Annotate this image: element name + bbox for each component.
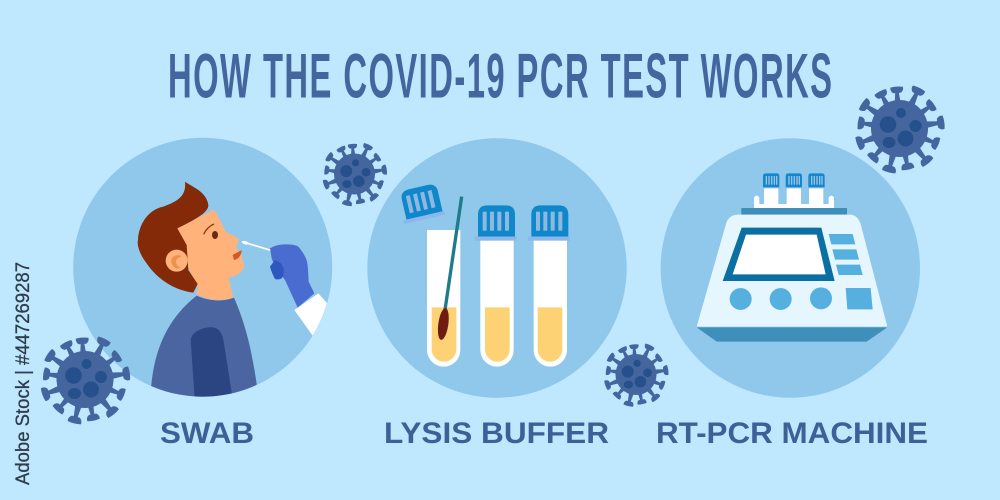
panel: rt-pcr machine [661, 138, 920, 398]
title: HOW THE COVID-19 PCR TEST WORKS [168, 41, 832, 111]
side credit text: Adobe Stock | #447269287 [13, 262, 34, 485]
illustration: PCR machine [697, 173, 887, 342]
label: swab: SWAB [160, 417, 254, 450]
panel: swab [73, 138, 332, 407]
icon: virus small centre right [604, 343, 669, 407]
swab circle [73, 138, 332, 397]
icon: virus small centre left [322, 143, 387, 207]
label: lysis buffer: LYSIS BUFFER [384, 417, 609, 450]
illustration: person being swabbed [138, 182, 327, 407]
machine circle [661, 138, 920, 398]
illustration: test tubes [397, 183, 570, 367]
icon: virus bottom left [40, 336, 131, 425]
label: rt-pcr machine: RT-PCR MACHINE [656, 417, 928, 450]
icon: virus top right [855, 85, 945, 174]
panel: lysis buffer [367, 138, 627, 398]
lysis circle [367, 138, 627, 398]
